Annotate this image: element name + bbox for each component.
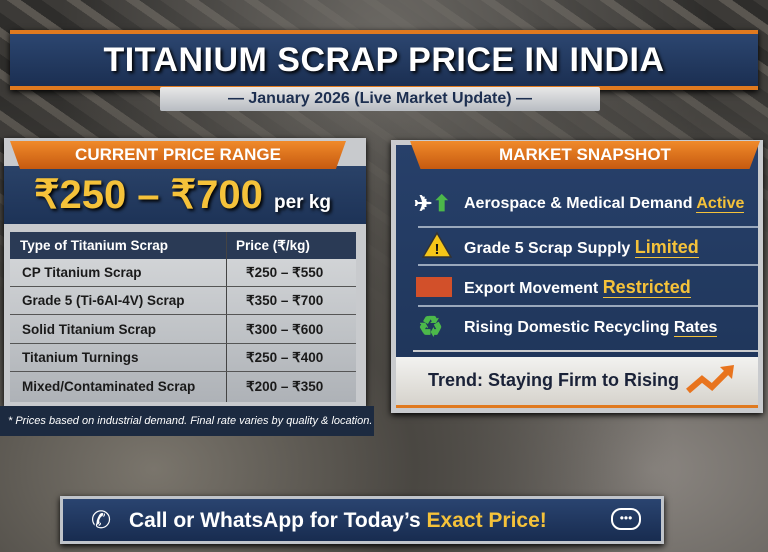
trend box — [396, 357, 758, 408]
table header: Price (₹/kg) — [236, 238, 310, 253]
row 1 — [10, 259, 356, 287]
item: recycling — [418, 311, 717, 342]
row 5: ₹200 – ₹350 — [246, 379, 323, 394]
row 2: Grade 5 (Ti-6Al-4V) Scrap — [22, 293, 185, 308]
icon: chat — [611, 508, 641, 530]
row 4: Titanium Turnings — [22, 350, 138, 365]
row 5: Mixed/Contaminated Scrap — [22, 379, 195, 394]
icon: warning: ! — [434, 241, 440, 258]
title banner — [10, 30, 758, 90]
table header: Type of Titanium Scrap — [20, 238, 168, 253]
footnote — [0, 406, 374, 436]
panel: current price range — [4, 138, 366, 406]
price area — [4, 166, 366, 224]
item: export: Export Movement Restricted — [464, 277, 691, 297]
icon: recycle: ♻ — [418, 311, 443, 342]
item: supply — [422, 232, 699, 258]
icon: warning — [422, 232, 452, 258]
row 3: Solid Titanium Scrap — [22, 322, 156, 337]
row 3: ₹300 – ₹600 — [246, 322, 323, 337]
icon: phone: ✆ — [91, 507, 111, 534]
row 5 — [22, 379, 323, 394]
subtitle bar — [160, 87, 600, 111]
item: aerospace — [414, 191, 744, 216]
item: recycling: Rising Domestic Recycling Rates — [464, 319, 717, 336]
title: TITANIUM SCRAP PRICE IN INDIA — [103, 41, 665, 79]
header: current price range: CURRENT PRICE RANGE — [75, 145, 281, 164]
icon: trend arrow — [686, 365, 734, 394]
icon: plane arrow: ✈⬆ — [414, 191, 451, 216]
item: supply: Grade 5 Scrap Supply Limited — [464, 237, 699, 257]
table — [10, 232, 356, 402]
table header — [10, 232, 356, 259]
call to action: Call or WhatsApp for Today’s Exact Price! — [129, 509, 547, 532]
row 1: ₹250 – ₹550 — [246, 265, 323, 280]
footnote: * Prices based on industrial demand. Final rate varies by quality & location. — [8, 415, 372, 427]
row 2: ₹350 – ₹700 — [246, 293, 323, 308]
big price: ₹250 – ₹700 per kg — [34, 173, 331, 217]
row 4 — [10, 344, 356, 372]
header: market snapshot: MARKET SNAPSHOT — [499, 145, 671, 164]
header: market snapshot — [410, 141, 760, 169]
row 2 — [10, 287, 356, 315]
row 3 — [10, 315, 356, 344]
panel: market snapshot — [391, 140, 763, 413]
trend box: Trend: Staying Firm to Rising — [428, 370, 679, 390]
icon: container — [416, 277, 452, 297]
subtitle bar: — January 2026 (Live Market Update) — — [228, 90, 532, 107]
row 4: ₹250 – ₹400 — [246, 350, 323, 365]
row 1: CP Titanium Scrap — [22, 265, 142, 280]
header: current price range — [10, 141, 346, 169]
icon: chat: ••• — [620, 511, 632, 525]
item: aerospace: Aerospace & Medical Demand Active — [464, 195, 744, 212]
call to action — [60, 496, 664, 544]
